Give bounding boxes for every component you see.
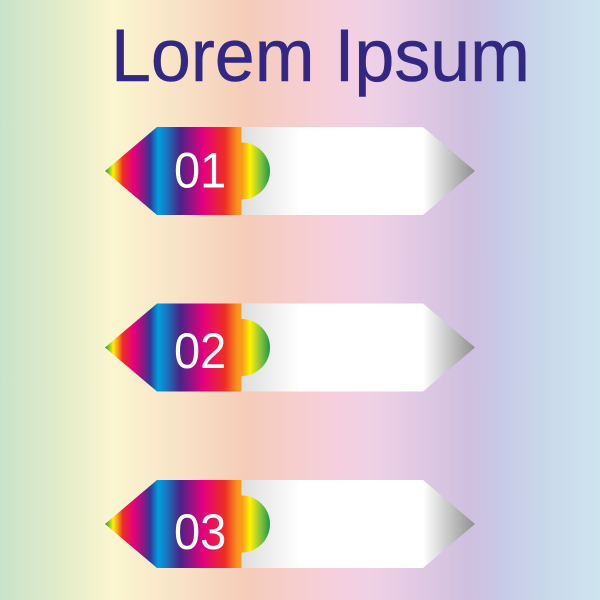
white label body [241, 480, 475, 568]
banner 01 [105, 127, 475, 215]
number 03: 03 [174, 505, 226, 560]
rainbow semicircle [242, 142, 270, 200]
banner 03 [105, 480, 475, 568]
rainbow arrow tab [105, 480, 242, 568]
rainbow arrow tab [105, 127, 242, 215]
number 02: 02 [174, 324, 226, 379]
rainbow semicircle [242, 319, 270, 376]
white label body [241, 304, 475, 392]
rainbow arrow tab [105, 304, 242, 392]
rainbow semicircle [242, 496, 270, 552]
white label body [241, 127, 475, 215]
banner 02 [105, 304, 475, 392]
title: Lorem Ipsum [111, 15, 530, 97]
number 01: 01 [174, 143, 226, 199]
